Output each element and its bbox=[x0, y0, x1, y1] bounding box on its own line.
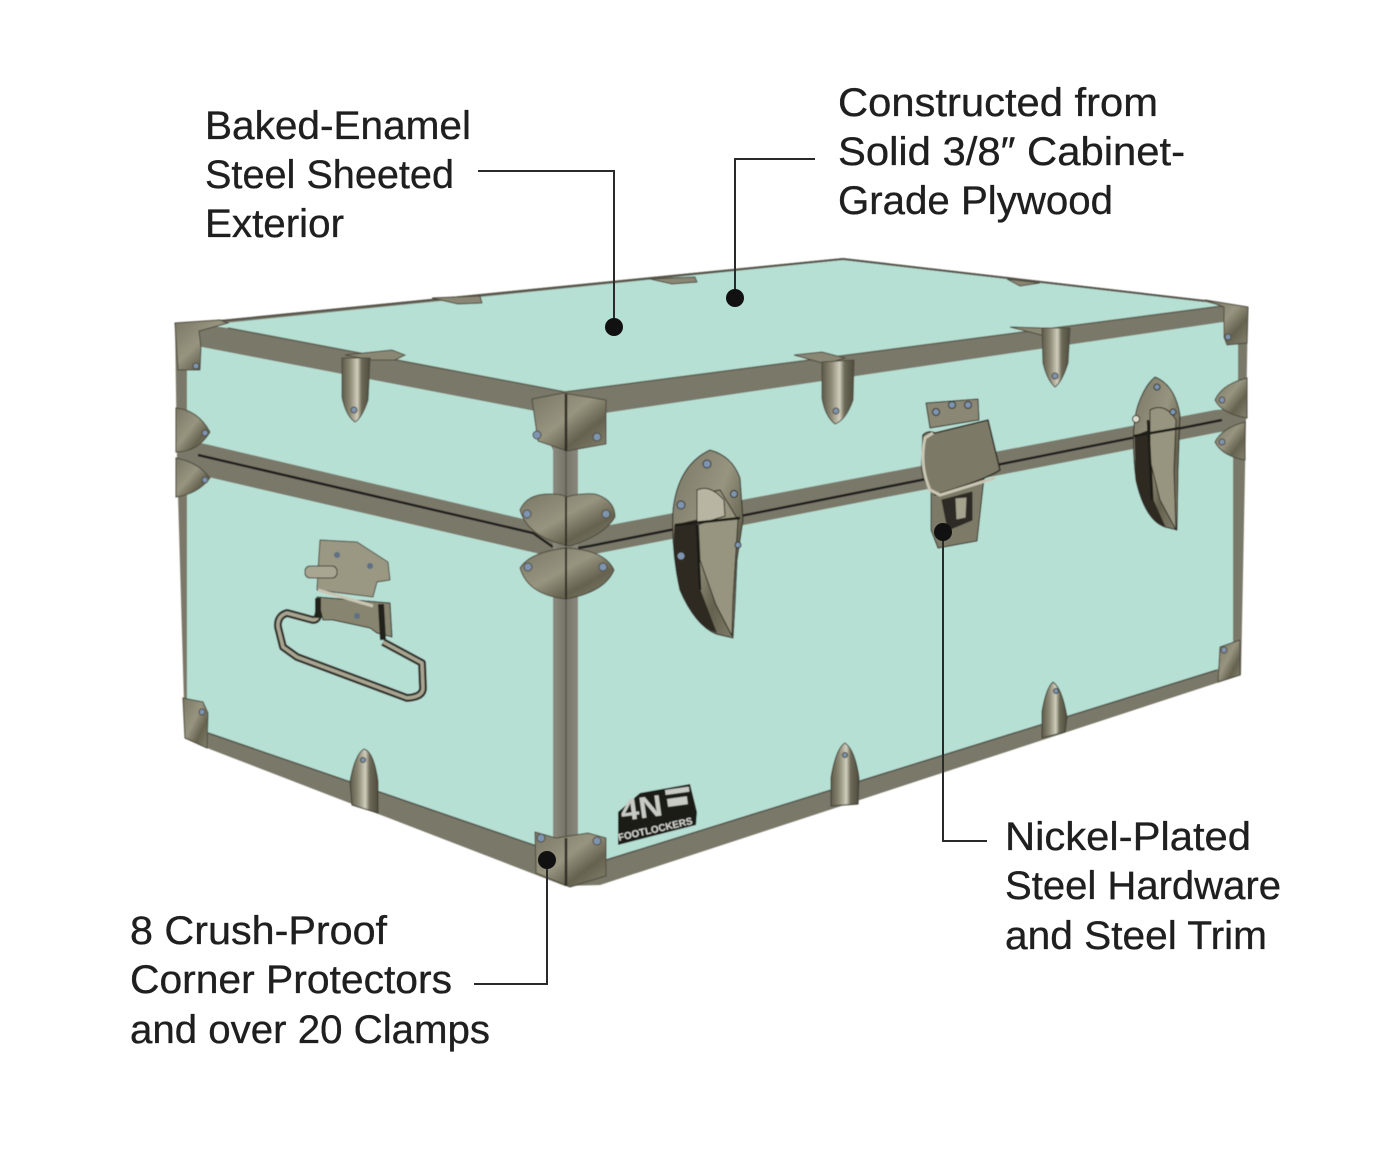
text: plywood: Constructed from bbox=[838, 81, 1158, 125]
trunk illustration bbox=[175, 258, 1248, 887]
callout: nickel-plated hardware bbox=[934, 523, 1281, 958]
text: corner protectors: and over 20 Clamps bbox=[130, 1008, 490, 1052]
text: plywood bbox=[838, 81, 1185, 223]
front centre latch bbox=[922, 399, 1000, 548]
leader line bbox=[726, 159, 815, 307]
callout: corner protectors bbox=[130, 851, 556, 1052]
text: corner protectors: Corner Protectors bbox=[130, 958, 452, 1002]
lid clamps bbox=[342, 277, 1070, 424]
logo: 4N Footlockers bbox=[617, 784, 697, 845]
mid-rail brackets bbox=[176, 378, 1247, 599]
logo: 4N Footlockers: FOOTLOCKERS bbox=[617, 816, 694, 844]
leader line bbox=[934, 523, 987, 841]
front right latch bbox=[1132, 377, 1180, 530]
text: corner protectors: 8 Crush-Proof bbox=[130, 909, 388, 953]
text: baked-enamel: Baked-Enamel bbox=[205, 104, 471, 148]
corner brackets bbox=[175, 300, 1248, 887]
text: plywood: Grade Plywood bbox=[838, 179, 1113, 223]
side handle bbox=[278, 540, 423, 698]
leader line bbox=[478, 171, 623, 336]
text: nickel-plated: and Steel Trim bbox=[1005, 914, 1267, 958]
trim lines bbox=[198, 259, 1222, 865]
front left latch bbox=[673, 450, 743, 638]
text: nickel-plated: Nickel-Plated bbox=[1005, 815, 1251, 859]
text: baked-enamel bbox=[205, 104, 471, 246]
text: baked-enamel: Exterior bbox=[205, 202, 344, 246]
text: baked-enamel: Steel Sheeted bbox=[205, 153, 454, 197]
callout: plywood construction bbox=[726, 81, 1185, 307]
callout: baked-enamel exterior bbox=[205, 104, 623, 336]
leader line bbox=[474, 851, 556, 984]
logo: 4N Footlockers: 4N bbox=[618, 789, 665, 828]
text: nickel-plated bbox=[1005, 815, 1281, 958]
text: plywood: Solid 3/8″ Cabinet- bbox=[838, 130, 1185, 174]
text: corner protectors bbox=[130, 909, 490, 1052]
lower clamps bbox=[350, 682, 1067, 813]
text: nickel-plated: Steel Hardware bbox=[1005, 864, 1281, 908]
trunk faces bbox=[175, 258, 1248, 886]
